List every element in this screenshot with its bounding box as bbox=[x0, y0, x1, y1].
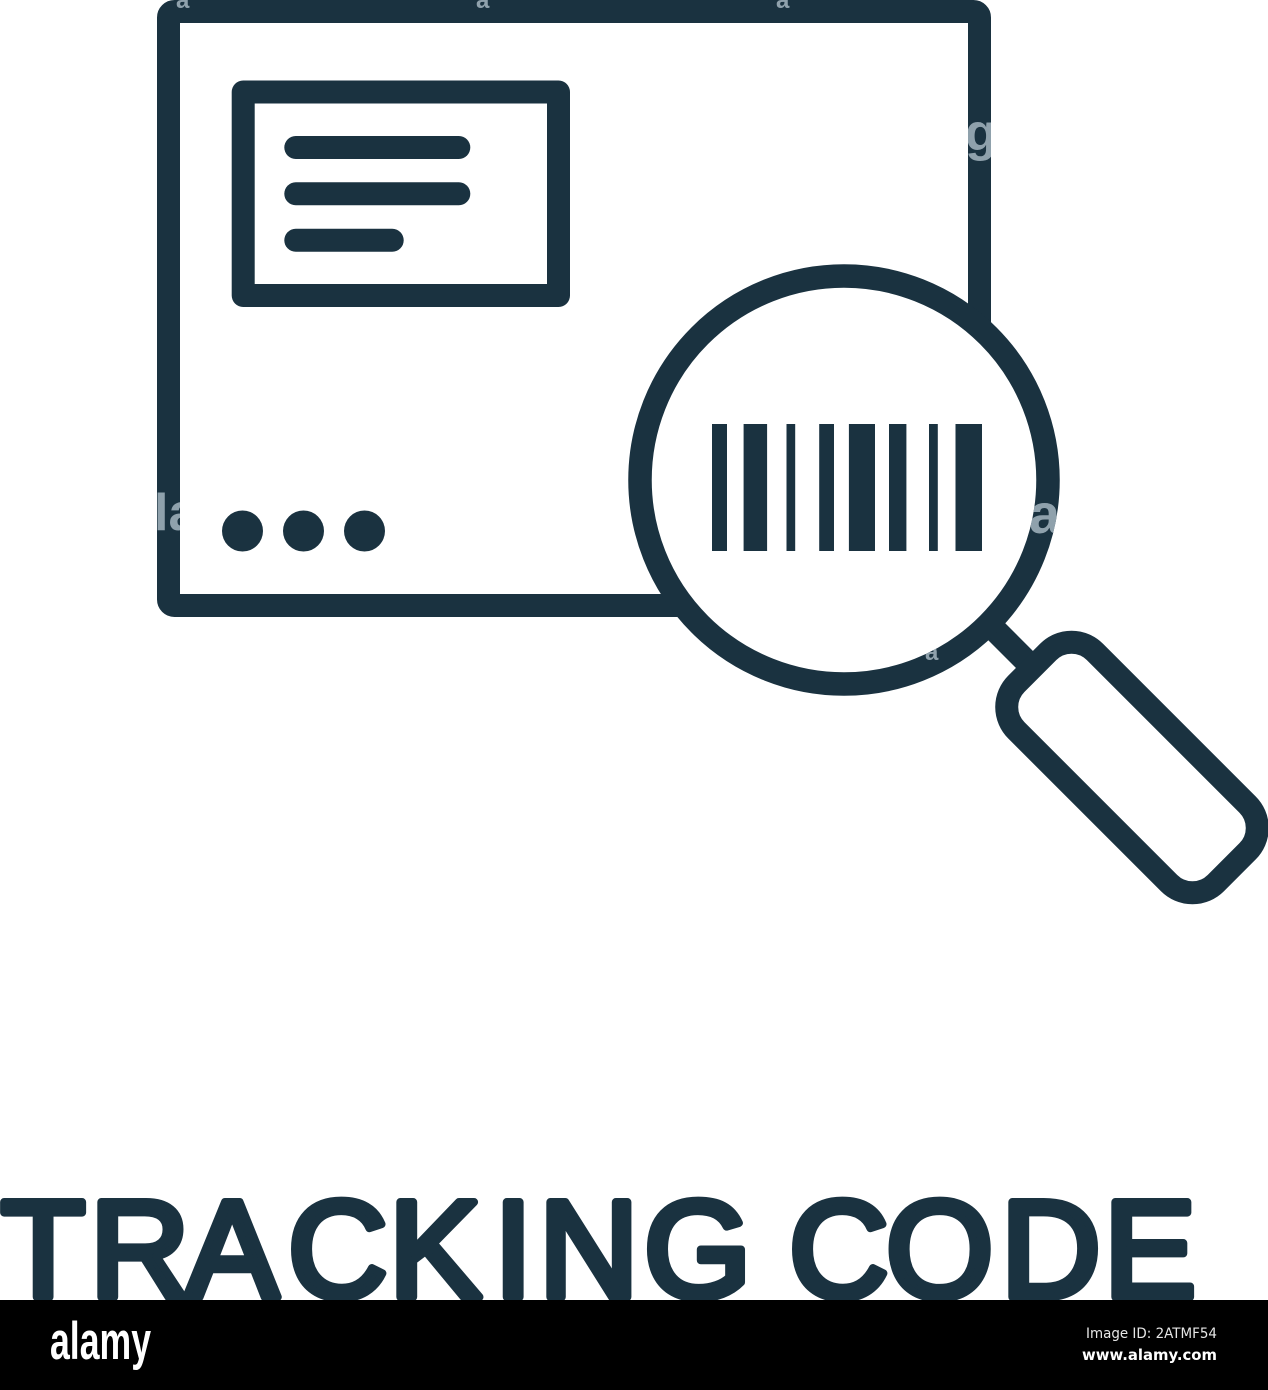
magnifier neck bbox=[996, 631, 1030, 665]
watermark fragments: la bbox=[154, 484, 198, 542]
magnifier lens bbox=[640, 276, 1048, 684]
icon: parcel box bbox=[168, 12, 980, 606]
watermark fragments: g bbox=[965, 104, 997, 162]
shipping label bbox=[243, 92, 558, 296]
alamy logo: alamy bbox=[50, 1312, 151, 1371]
magnifier handle bbox=[993, 629, 1268, 906]
watermark fragments: a bbox=[925, 639, 939, 666]
parcel outline bbox=[168, 12, 980, 606]
watermark fragments: al bbox=[1029, 482, 1076, 545]
icon: magnifying glass bbox=[640, 276, 1268, 906]
image id: Image ID: 2ATMF54 bbox=[1086, 1326, 1217, 1342]
website: www.alamy.com bbox=[1082, 1346, 1217, 1364]
three dots bbox=[222, 510, 385, 552]
footer bar bbox=[0, 1300, 1268, 1390]
title: TRACKING CODE bbox=[1, 1173, 1196, 1327]
barcode bbox=[712, 424, 982, 551]
watermark fragments bbox=[154, 0, 1076, 666]
